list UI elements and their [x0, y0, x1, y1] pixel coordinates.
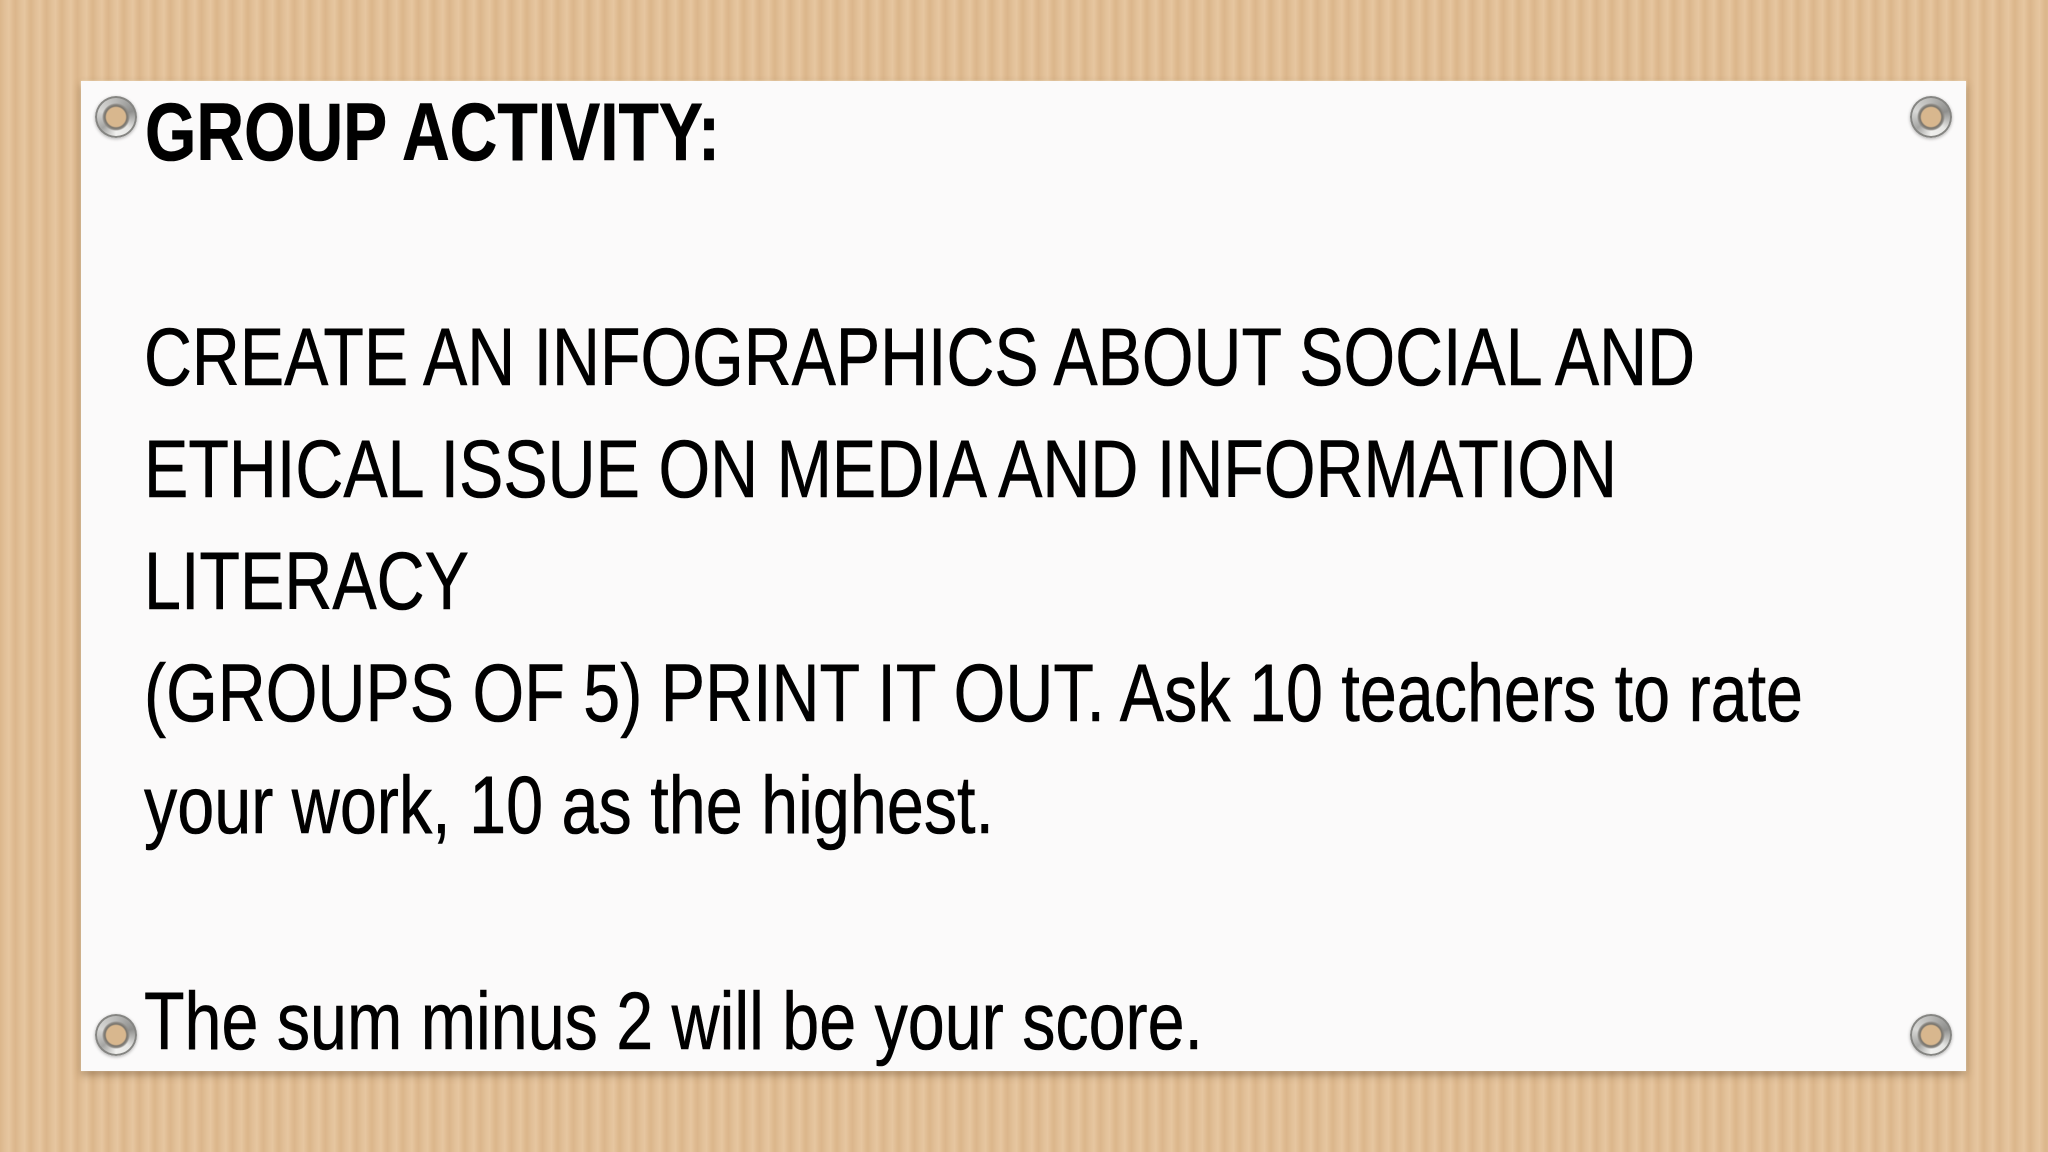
icon: grommet top left [95, 96, 137, 138]
line: score: The sum minus 2 will be your score. [144, 976, 1203, 1067]
line: create infographics: CREATE AN INFOGRAPHICS ABOUT SOCIAL AND [144, 312, 1695, 403]
line: literacy: LITERACY [144, 536, 469, 627]
line: ethical issue: ETHICAL ISSUE ON MEDIA AND INFORMATION [144, 424, 1617, 515]
panel: white paper sheet [81, 81, 1966, 1071]
heading: GROUP ACTIVITY: [145, 87, 720, 178]
line: your work: your work, 10 as the highest. [144, 760, 994, 851]
icon: grommet top right [1910, 96, 1952, 138]
icon: grommet bottom left [95, 1014, 137, 1056]
icon: grommet bottom right [1910, 1014, 1952, 1056]
